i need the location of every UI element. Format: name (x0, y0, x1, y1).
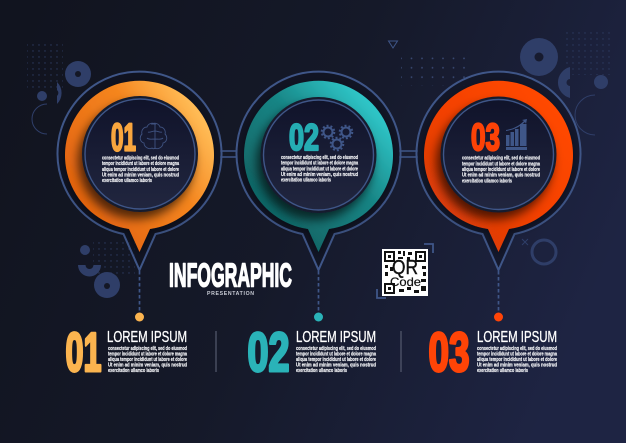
bottom body 1: consectetur adipiscing elit, sed do eiusmod (108, 346, 187, 352)
decoration: top right shapes (388, 30, 611, 135)
bottom body 1: aliqua tempor incididunt ut labore et dolore (108, 357, 187, 363)
body text 1: Ut enim ad minim veniam, quis nostrud (102, 172, 179, 178)
body text 3: tempor incididunt ut labore et dolore magna (462, 161, 540, 167)
decoration: top left shapes (27, 42, 91, 134)
title: INFOGRAPHIC (169, 258, 292, 294)
bottom body 1: tempor incididunt ut labore et dolore magna (108, 351, 187, 357)
icon: bar chart (506, 119, 527, 150)
icon: gears (322, 126, 352, 150)
pin 3: red (416, 72, 580, 270)
title (169, 258, 292, 297)
bottom body 1: exercitation ullamco laboris (108, 368, 159, 374)
bottom item 2 (248, 321, 376, 383)
bottom item 1 (66, 321, 187, 383)
bottom number 01: 01 (66, 321, 102, 383)
body text 3: exercitation ullamco laboris (462, 178, 512, 184)
bottom heading 3: LOREM IPSUM (477, 329, 557, 346)
QR code: Code (390, 275, 421, 289)
body text 2: aliqua tempor incididunt ut labore et dolore (281, 166, 358, 172)
body text 2: exercitation ullamco laboris (281, 178, 331, 184)
number 02: 02 (289, 117, 319, 158)
dashed stem and dot 3 (494, 271, 503, 322)
bottom body 3: exercitation ullamco laboris (477, 368, 528, 374)
icon: brain (140, 123, 167, 149)
bottom body 2: consectetur adipiscing elit, sed do eiusmod (296, 346, 376, 352)
body text 2 (281, 155, 358, 184)
pin 2: teal (236, 72, 400, 270)
body text 2: Ut enim ad minim veniam, quis nostrud (281, 172, 358, 178)
body text 1 (102, 156, 179, 184)
bottom body 3: aliqua tempor incididunt ut labore et dolore (477, 357, 557, 363)
divider 2 (400, 331, 402, 372)
dashed stem and dot 2 (314, 271, 323, 322)
QR code (377, 244, 433, 298)
body text 3: Ut enim ad minim veniam, quis nostrud (462, 173, 540, 179)
bottom body 2: aliqua tempor incididunt ut labore et dolore (296, 357, 376, 363)
bottom number 03: 03 (428, 321, 470, 383)
bottom heading 2: LOREM IPSUM (296, 329, 376, 346)
decoration: ring and cross (522, 239, 556, 264)
body text 2: consectetur adipiscing elit, sed do eiusmod (281, 155, 358, 161)
body text 3 (462, 156, 540, 184)
bottom body 3: tempor incididunt ut labore et dolore magna (477, 351, 557, 357)
bottom body 1: Ut enim ad minim veniam, quis nostrud (108, 362, 187, 368)
bottom body 2: exercitation ullamco laboris (296, 368, 347, 374)
bottom item 3 (428, 321, 557, 383)
number 01: 01 (111, 116, 136, 160)
connectors between pins (220, 151, 418, 157)
body text 1: consectetur adipiscing elit, sed do eiusmod (102, 156, 179, 162)
body text 3: aliqua tempor incididunt ut labore et dolore (462, 167, 540, 173)
bottom body 3: Ut enim ad minim veniam, quis nostrud (477, 362, 557, 368)
dashed stem and dot 1 (135, 271, 144, 322)
body text 3: consectetur adipiscing elit, sed do eiusmod (462, 156, 540, 162)
decoration: bottom left shapes (78, 238, 135, 298)
bottom body 1 (108, 346, 187, 374)
bottom body 3: consectetur adipiscing elit, sed do eiusmod (477, 346, 557, 352)
bottom number 02: 02 (248, 321, 290, 383)
body text 2: tempor incididunt ut labore et dolore magna (281, 161, 358, 167)
bottom body 3 (477, 346, 557, 374)
bottom heading 1: LOREM IPSUM (107, 329, 187, 346)
bottom body 2: tempor incididunt ut labore et dolore magna (296, 351, 376, 357)
bottom body 2 (296, 346, 376, 374)
divider 1 (215, 331, 217, 372)
body text 1: aliqua tempor incididunt ut labore et dolore (102, 167, 179, 173)
number 03: 03 (471, 117, 500, 159)
body text 1: exercitation ullamco laboris (102, 178, 152, 184)
bottom body 2: Ut enim ad minim veniam, quis nostrud (296, 362, 376, 368)
pin 1: orange (58, 72, 221, 270)
body text 1: tempor incididunt ut labore et dolore magna (102, 161, 179, 167)
subtitle: PRESENTATION (207, 291, 254, 297)
QR code: QR (392, 257, 418, 279)
